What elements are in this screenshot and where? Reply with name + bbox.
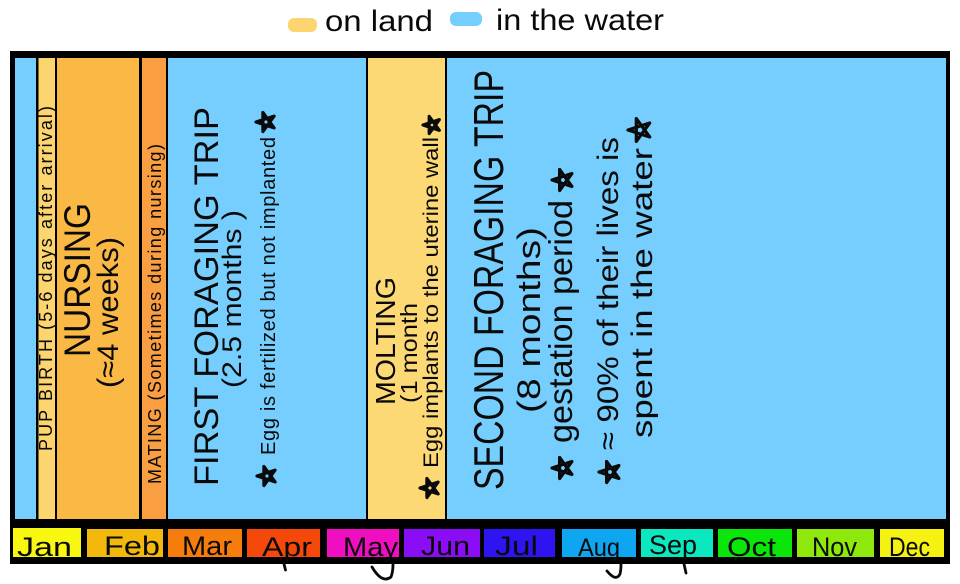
month axis: Apr — [262, 532, 312, 562]
legend swatch: in the water — [450, 12, 482, 26]
molting heading: MOLTING — [370, 277, 401, 405]
second foraging duration: (8 months) — [511, 227, 547, 413]
month axis: Dec — [889, 532, 930, 562]
pen strokes running below the frame — [284, 564, 686, 579]
panel: mating — [142, 58, 166, 519]
molting duration: (1 month — [396, 303, 422, 403]
icon: star — [257, 466, 275, 486]
mating text: MATING (Sometimes during nursing) — [145, 144, 165, 484]
icon: star — [552, 170, 572, 190]
panel: in the water, early January — [15, 58, 36, 519]
first foraging note: Egg is fertilized but not implanted — [258, 137, 280, 455]
month axis: Aug — [578, 534, 620, 562]
month: Mar — [168, 529, 242, 557]
month: Nov — [797, 529, 874, 557]
month axis: Feb — [104, 531, 160, 561]
panel: second foraging trip — [447, 58, 946, 519]
icon: star — [256, 112, 274, 132]
month axis: Jun — [421, 531, 470, 561]
month: Feb — [87, 529, 163, 557]
month axis — [13, 528, 944, 562]
month axis: Mar — [182, 531, 232, 561]
month axis: Oct — [727, 532, 777, 562]
legend — [288, 4, 664, 38]
gestation period note: gestation period — [542, 200, 579, 443]
month: Apr — [247, 529, 320, 557]
molting note: Egg implants to the uterine wall — [420, 137, 443, 468]
month: Jan — [13, 528, 81, 557]
month: Oct — [718, 529, 792, 557]
icon: star — [420, 478, 438, 498]
month axis: Jul — [495, 531, 538, 561]
first foraging duration: (2.5 months ) — [217, 210, 247, 388]
time in water note line 1: ≈ 90% of their lives is — [592, 137, 625, 450]
icon: star — [552, 458, 572, 478]
time in water note line 2: spent in the water — [626, 148, 659, 438]
month: Dec — [880, 529, 944, 557]
month: Sep — [641, 529, 713, 557]
icon: star — [628, 119, 650, 141]
month axis: Nov — [812, 532, 857, 562]
month: Jul — [484, 529, 555, 557]
month axis: Jan — [17, 532, 72, 562]
legend label: in the water: in the water — [496, 4, 664, 37]
panel: first foraging trip — [168, 58, 366, 519]
month: May — [327, 529, 399, 557]
panel: pup birth — [36, 58, 56, 519]
nursing duration: (≈4 weeks) — [92, 237, 125, 388]
month: Aug — [562, 529, 636, 557]
panel: nursing — [57, 58, 139, 519]
panel: molting — [368, 58, 445, 519]
legend label: on land: on land — [325, 5, 433, 38]
legend swatch: on land — [288, 18, 317, 32]
icon: star — [599, 462, 619, 482]
month axis: Sep — [649, 530, 697, 560]
first foraging heading: FIRST FORAGING TRIP — [188, 107, 226, 486]
pup birth text: PUP BIRTH (5-6 days after arrival) — [36, 106, 56, 451]
month axis: May — [343, 532, 399, 562]
month: Jun — [404, 529, 480, 557]
icon: star — [423, 116, 439, 134]
nursing heading: NURSING — [57, 203, 98, 357]
